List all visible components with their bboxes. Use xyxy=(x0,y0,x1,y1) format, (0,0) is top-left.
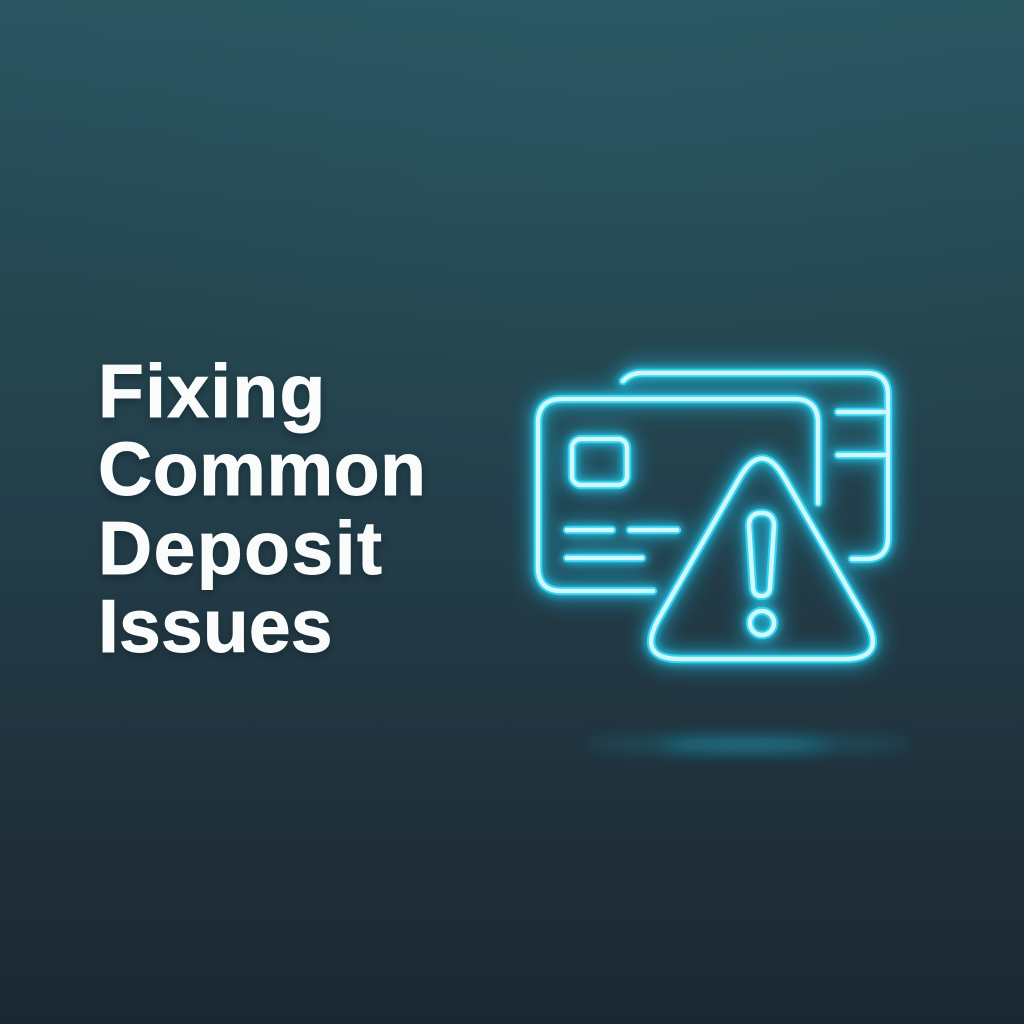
icon: inner glow xyxy=(538,373,888,659)
title: Deposit xyxy=(98,506,384,590)
title xyxy=(98,349,427,668)
icon: neon tube xyxy=(538,373,888,659)
icon: tube core xyxy=(538,373,888,659)
floor glow xyxy=(583,737,913,751)
icon: outer glow xyxy=(538,373,888,659)
title: Issues xyxy=(98,584,333,668)
title: Fixing xyxy=(98,349,327,433)
title: Common xyxy=(98,427,427,511)
